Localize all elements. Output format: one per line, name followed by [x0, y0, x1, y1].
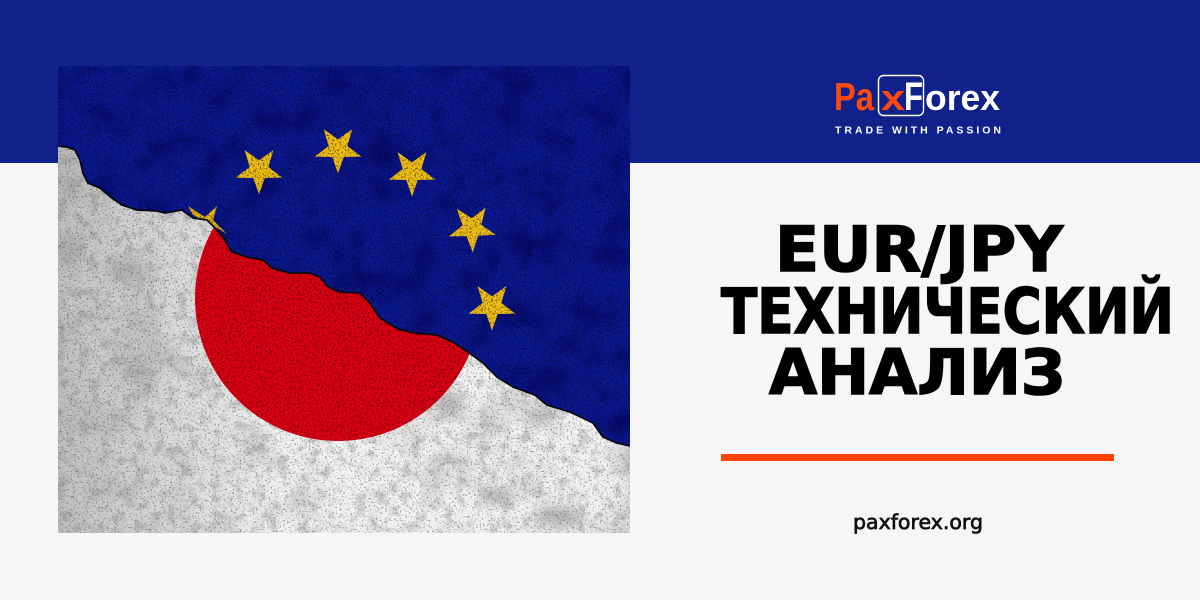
red sun disc [195, 228, 470, 441]
broken star 6 [188, 206, 227, 234]
title: EUR/JPY [775, 213, 1064, 286]
star 5 [469, 286, 515, 330]
crack shadow line [58, 146, 630, 446]
header band [0, 0, 1200, 163]
star 2 [315, 129, 361, 174]
logo: PaxForex: F [904, 75, 923, 119]
photo: cracked concrete with EU and Japan flags [56, 66, 630, 533]
logo: PaxForex: orex [925, 77, 1000, 118]
star 3 [389, 152, 435, 196]
website url: paxforex.org [853, 510, 983, 534]
title [721, 213, 1174, 409]
concrete wall with Japanese flag [58, 146, 630, 533]
logo wordmark: Pa [834, 76, 874, 119]
logo: PaxForex: x [881, 77, 905, 118]
star 4 [448, 207, 496, 253]
star 1 [236, 150, 282, 194]
logo: PaxForex [834, 75, 1001, 136]
EU flag field [58, 66, 630, 446]
orange divider [721, 454, 1114, 461]
logo box [878, 76, 924, 116]
title: АНАЛИЗ [769, 336, 1065, 409]
logo tagline: TRADE WITH PASSION [835, 124, 1001, 136]
